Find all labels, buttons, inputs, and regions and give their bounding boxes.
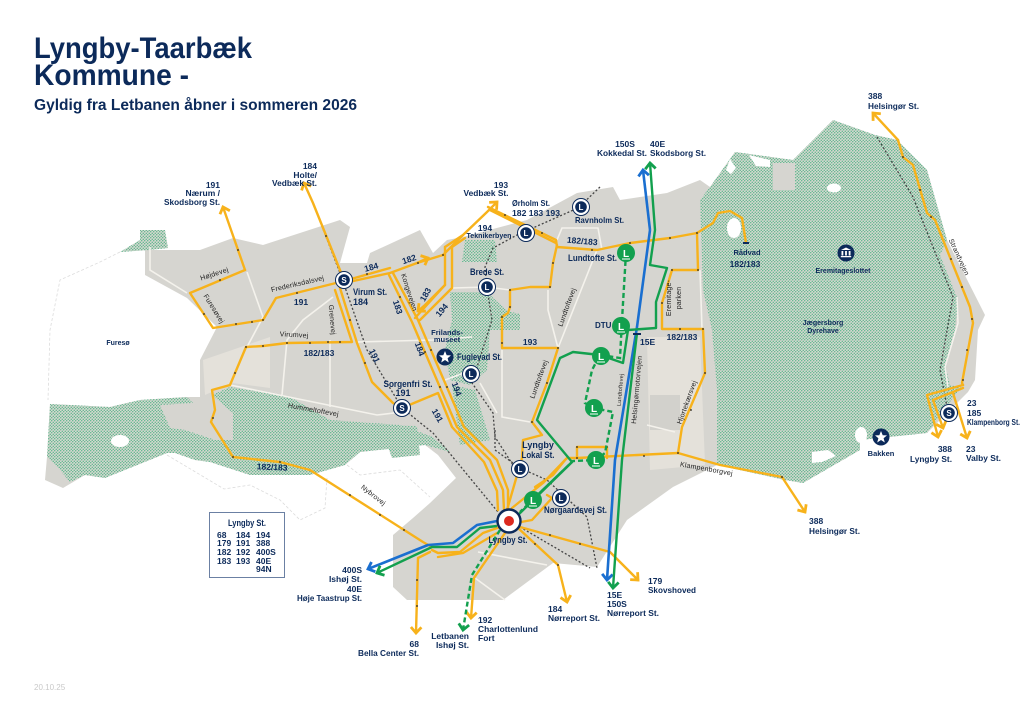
grey clearing in the deer park [773,163,795,190]
forest areas [47,120,963,483]
route numbers table: 192 [236,547,250,557]
Ravnholm: L [579,203,584,212]
destination and station labels: Frilands- [431,328,463,337]
road names: parken [676,287,683,309]
road names: Eremitage- [666,279,673,316]
destination and station labels: Lokal St. [522,450,554,460]
date stamp: 20.10.25 [34,683,66,692]
map base: municipality land [45,120,985,600]
Lyngby St. hub station [498,510,520,532]
panel: Lyngby St. route list [210,512,284,578]
road names: Hummeltoftevej [287,403,339,418]
stop ticks on routes [204,157,972,606]
destination and station labels: Holte/ [293,170,318,180]
destination and station labels: Bakken [868,449,895,458]
destination and station labels: 15E [607,590,622,600]
title line 2: Kommune - [34,59,189,92]
S-train station: Sorgenfri [394,400,410,416]
destination and station labels: 182/183 [730,259,761,269]
route numbers table: 68 [217,530,227,540]
road names [200,238,970,508]
destination and station labels: 191 [395,388,411,398]
line 15E terminus bar [633,333,641,335]
road names: Furesøvej [202,293,225,325]
road names: Lundtoftevej [529,359,550,400]
road names: Grenevej [327,305,336,335]
destination and station labels: museet [434,335,461,344]
Fuglevad [462,366,480,382]
destination and station labels: Skodsborg St. [164,197,220,207]
lake outlines [48,252,430,520]
destination and station labels: 184 [548,604,562,614]
destination and station labels: Letbanen [431,631,469,641]
destination and station labels: 191 [206,180,220,190]
road names: Kongevejen [399,273,418,312]
Rådvad terminus bar [743,242,749,244]
route numbers table: 182 [217,547,231,557]
bus routes: yellow [190,113,973,633]
destination and station labels: Lyngby [522,440,554,450]
railway lines (dotted) [313,137,953,568]
destination and station labels: Skovshoved [648,585,696,595]
route numbers table: 400S [256,547,276,557]
S-train station: Klampenborg: S [946,409,952,418]
destination and station labels [106,91,1020,658]
stop at hub [524,491,542,509]
destination and station labels: Ishøj St. [436,640,469,650]
route numbers on lines: 194 [450,381,464,398]
route numbers table: 388 [256,538,270,548]
road names: Strandvejen [947,238,970,277]
stop north [592,347,610,365]
light rail (Letbanen) stations [524,244,635,509]
road names: Klampenborgvej [679,461,733,478]
destination and station labels: 400S [342,565,362,575]
destination and station labels: Ravnholm St. [575,215,624,225]
panel heading: Lyngby St. [228,518,266,528]
destination and station labels: Helsingør St. [868,101,919,111]
destination and station labels: Rådvad [733,248,761,257]
stop at hub: L [530,496,536,507]
route numbers table: 183 [217,556,231,566]
destination and station labels: Charlottenlund [478,624,538,634]
route numbers on lines: 182 [401,252,418,266]
white lakes and clearings [111,155,867,463]
destination and station labels: Ørholm St. [512,198,550,208]
road names: Hjortekærsvej [676,380,699,425]
destination and station labels: Helsingør St. [809,526,860,536]
title: Lyngby-Taarbæk [34,32,252,65]
route numbers on lines: 182/183 [667,332,698,342]
destination and station labels: Lyngby St. [488,535,528,545]
destination and station labels: Vedbæk St. [464,188,508,198]
stop south: L [593,456,599,467]
destination and station labels: 388 [868,91,882,101]
blue routes [368,170,650,580]
Lyngby Lokal: L [518,465,523,474]
S-train station: Virum [336,272,352,288]
destination and station labels: Jægersborg [803,320,843,327]
Lyngby Lokal [512,460,528,478]
destination and station labels: DTU [595,321,612,330]
route numbers on lines [257,235,698,473]
road names: Lundtoftevej [617,374,625,406]
destination and station labels: Lundtofte St. [568,253,617,263]
destination and station labels: 185 [967,408,981,418]
Brede [478,278,496,296]
local rail stations [462,198,590,506]
destination and station labels: Nørgaardsvej St. [544,505,607,515]
Nørgaardsvej [552,490,570,506]
route numbers table: 179 [217,538,231,548]
destination and station labels: Nærum / [186,188,221,198]
Brede: L [485,283,490,292]
destination and station labels: 40E [347,584,362,594]
S-train station: Virum: S [341,276,347,285]
stop north: L [598,352,604,363]
destination and station labels: 40E [650,139,665,149]
destination and station labels: 68 [410,639,419,649]
route numbers on lines: 184 [363,260,380,274]
route numbers on lines: 191 [430,407,446,424]
S-train station: Sorgenfri: S [399,404,405,413]
route numbers on lines: 191 [367,347,382,365]
Ørholm [518,224,534,242]
destination and station labels: 184 [353,297,368,307]
destination and station labels: Høje Taastrup St. [297,593,362,603]
destination and station labels: Eremitageslottet [816,266,871,275]
destination and station labels: 192 [478,615,492,625]
destination and station labels: Skodsborg St. [650,148,706,158]
destination and station labels: Fuglevad St. [457,352,502,362]
destination and station labels: 182 183 193 [512,208,560,218]
DTU [612,317,630,335]
destination and station labels: 388 [938,444,952,454]
stop middle: L [591,404,597,415]
Ørholm: L [524,229,529,238]
destination and station labels: 193 [494,180,508,190]
destination and station labels: Fort [478,633,495,643]
destination and station labels: Bella Center St. [358,648,419,658]
destination and station labels: 179 [648,576,662,586]
route numbers table: 193 [236,556,250,566]
icon: star Frilandsmuseet [436,348,454,366]
destination and station labels: 388 [809,516,823,526]
destination and station labels: Furesø [106,340,130,347]
destination and station labels: Vedbæk St. [272,178,317,188]
destination and station labels: Valby St. [966,453,1001,463]
stop middle [585,399,603,417]
destination and station labels: Brede St. [470,267,504,277]
Lundtofte: L [623,249,629,260]
destination and station labels: 194 [478,223,492,233]
route numbers table: 184 [236,530,250,540]
Fuglevad: L [469,370,474,379]
route numbers table: 191 [236,538,250,548]
route numbers on lines: 182/183 [567,235,598,247]
icon: Eremitageslottet museum [838,244,854,262]
Ravnholm [572,198,590,216]
destination and station labels: Dyrehave [807,328,839,335]
route numbers on lines: 15E [640,337,655,347]
destination and station labels: Sorgenfri St. [384,379,432,389]
route numbers on lines: 184 [413,341,427,358]
route numbers on lines: 182/183 [257,461,288,473]
route numbers on lines: 182/183 [304,348,335,358]
route numbers table: 94N [256,564,272,574]
stop south [587,451,605,469]
route numbers table: 40E [256,556,271,566]
destination and station labels: 23 [967,398,977,408]
DTU: L [618,322,624,333]
destination and station labels: 23 [966,444,976,454]
S-train station: Klampenborg [940,404,958,422]
destination and station labels: Nørreport St. [607,608,659,618]
destination and station labels: Virum St. [353,287,387,297]
road names: Nybrovej [359,484,387,508]
destination and station labels: Kokkedal St. [597,148,647,158]
route numbers on lines: 193 [523,337,537,347]
destination and station labels: 150S [607,599,627,609]
road names: Frederiksdalsvej [270,275,325,294]
route numbers on lines: 183 [391,299,405,316]
road names: Helsingørmotorvejen [631,355,644,424]
destination and station labels: Nørreport St. [548,613,600,623]
destination and station labels: Ishøj St. [329,574,362,584]
destination and station labels: 150S [615,139,635,149]
local roads [150,228,958,600]
Nørgaardsvej: L [559,494,564,503]
route numbers on lines: 191 [294,297,308,307]
destination and station labels: Lyngby St. [910,454,952,464]
road names: Højdevej [200,267,230,282]
route numbers table [217,530,276,574]
route numbers table: 194 [256,530,270,540]
destination and station labels: 184 [303,161,317,171]
road names: Virumvej [280,331,309,340]
route numbers on lines: 194 [433,301,450,319]
road names: Lundtoftevej [557,287,578,328]
icon: star Bakken [872,428,890,446]
Lundtofte [617,244,635,262]
subtitle: Gyldig fra Letbanen åbner i sommeren 2026 [34,97,357,114]
green routes [377,163,667,630]
destination and station labels: Teknikerbyen [466,231,512,240]
route numbers on lines: 183 [418,286,433,303]
